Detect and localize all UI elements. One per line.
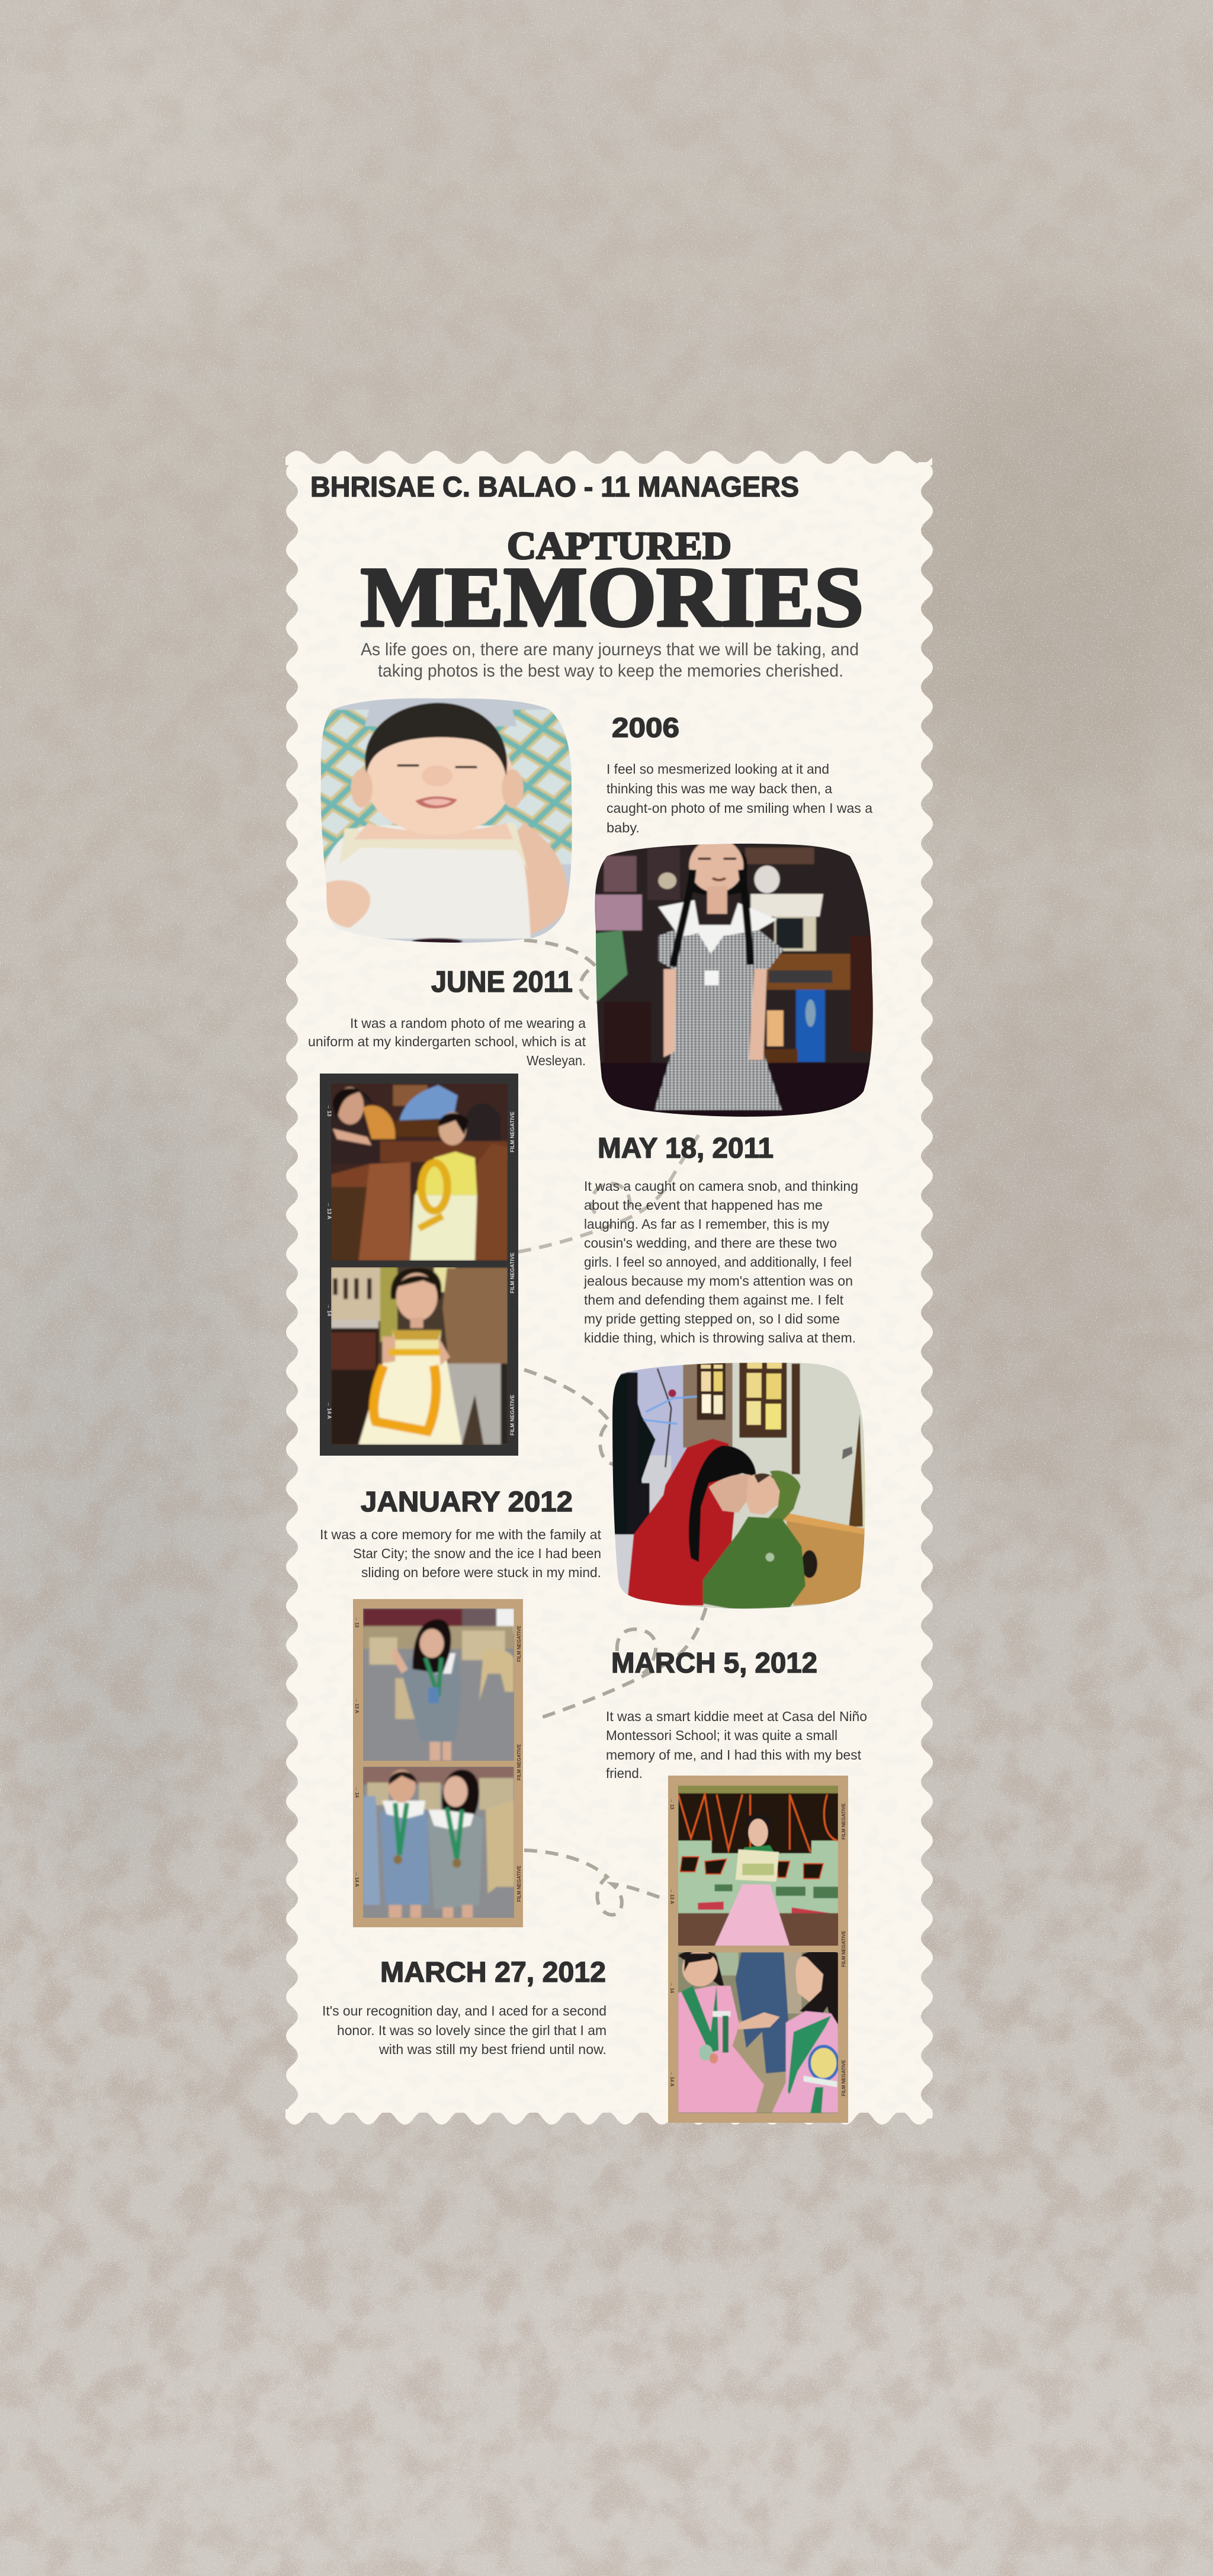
text: May 18, 2011 story <box>583 1178 858 1345</box>
text: May 18, 2011 story: my pride getting stepped on, so I did some <box>584 1311 840 1327</box>
text: March 5, 2012 story: Montessori School; it was quite a small <box>606 1728 837 1743</box>
text: March 27, 2012 story: with was still my best friend until now. <box>378 2042 606 2057</box>
subtitle: As life goes on, there are many journeys that we will be taking, and <box>361 640 859 659</box>
film labels: → 13 <box>354 1616 360 1628</box>
film labels: FILM NEGATIVE <box>509 1395 515 1436</box>
text: January 2012 story: Star City; the snow and the ice I had been <box>353 1546 601 1561</box>
frame: girl in pew <box>329 1079 509 1266</box>
frame: girl with flower basket <box>329 1266 509 1449</box>
heading: March 5, 2012: MARCH 5, 2012 <box>611 1648 817 1679</box>
face <box>365 719 514 835</box>
text: June 2011 story: Wesleyan. <box>527 1053 586 1068</box>
text: March 5, 2012 story: memory of me, and I had this with my best <box>606 1747 862 1763</box>
panel: torn cream paper <box>283 447 936 2127</box>
text: 2006 story: caught-on photo of me smiling when I was a <box>606 800 872 816</box>
heading: March 27, 2012: MARCH 27, 2012 <box>380 1957 606 1988</box>
text: March 5, 2012 story: friend. <box>606 1766 643 1781</box>
film labels: FILM NEGATIVE <box>509 1111 515 1152</box>
film labels: → 14 <box>669 1982 675 1994</box>
arm and body <box>517 823 568 936</box>
author heading: BHRISAE C. BALAO - 11 MANAGERS <box>310 472 799 503</box>
title: MEMORIES <box>361 550 864 645</box>
frame: girl with certificate <box>677 1785 839 1947</box>
text: January 2012 story: It was a core memory for me with the family at <box>320 1527 602 1542</box>
film labels: → 13 <box>669 1798 675 1810</box>
text: June 2011 story <box>308 1015 586 1068</box>
film labels: → 14 A <box>669 2071 675 2087</box>
frame: girl waving among chairs <box>358 1606 518 1764</box>
dashed path: baby photo to uniform photo <box>524 940 601 1002</box>
photo: smiling baby <box>321 698 572 943</box>
text: 2006 story: I feel so mesmerized looking at it and <box>606 761 829 777</box>
girl <box>689 845 747 898</box>
dashed path: film strip to Star City photo <box>524 1370 622 1465</box>
film labels <box>326 1104 515 1436</box>
text: May 18, 2011 story: about the event that happened has me <box>584 1197 823 1213</box>
text: May 18, 2011 story: It was a caught on camera snob, and thinking <box>584 1178 858 1194</box>
film labels: FILM NEGATIVE <box>516 1625 522 1662</box>
film strip: recognition day photos <box>668 1776 848 2123</box>
subtitle: taking photos is the best way to keep the memories cherished. <box>378 661 843 681</box>
film labels: → 13 A <box>326 1202 332 1220</box>
title: CAPTURED <box>507 524 731 568</box>
film strip: wedding photos <box>320 1074 518 1456</box>
photo: girl in gingham uniform <box>589 838 880 1121</box>
heading: January 2012: JANUARY 2012 <box>361 1486 573 1518</box>
film labels: → 13 A <box>354 1697 360 1713</box>
text: June 2011 story: uniform at my kindergarten school, which is at <box>308 1034 586 1049</box>
frame: two girls with medals <box>358 1764 518 1923</box>
heading: 2006: 2006 <box>612 712 679 743</box>
film labels: FILM NEGATIVE <box>841 2059 846 2096</box>
text: March 5, 2012 story: It was a smart kiddie meet at Casa del Niño <box>606 1709 867 1724</box>
text: June 2011 story: It was a random photo of me wearing a <box>350 1015 586 1031</box>
film labels: FILM NEGATIVE <box>841 1930 846 1967</box>
film labels: FILM NEGATIVE <box>516 1744 522 1780</box>
text: March 27, 2012 story <box>322 2003 606 2057</box>
text: 2006 story <box>606 761 872 835</box>
subtitle <box>361 640 859 681</box>
text: May 18, 2011 story: them and defending them against me. I felt <box>584 1292 844 1308</box>
dashed path: March film strip to recognition film strip <box>524 1850 665 1915</box>
film labels: → 13 A <box>669 1888 675 1904</box>
film labels: → 14 A <box>354 1871 360 1887</box>
film labels: FILM NEGATIVE <box>841 1803 846 1840</box>
text: 2006 story: baby. <box>606 820 640 835</box>
film labels: FILM NEGATIVE <box>509 1252 515 1293</box>
film labels: FILM NEGATIVE <box>516 1865 522 1902</box>
text: May 18, 2011 story: girls. I feel so annoyed, and additionally, I feel <box>584 1254 852 1270</box>
film strip: Casa del Niño photos <box>353 1599 523 1927</box>
text: January 2012 story: sliding on before were stuck in my mind. <box>361 1565 601 1580</box>
text: March 27, 2012 story: It's our recognition day, and I aced for a second <box>322 2003 606 2018</box>
text: March 5, 2012 story <box>606 1709 867 1781</box>
text: January 2012 story <box>320 1527 602 1580</box>
heading: June 2011: JUNE 2011 <box>431 965 573 998</box>
film labels: → 14 <box>354 1786 360 1798</box>
text: May 18, 2011 story: cousin's wedding, and there are these two <box>584 1235 837 1251</box>
text: 2006 story: thinking this was me way back then, a <box>606 781 832 796</box>
dashed path: film strip to wedding story <box>518 1129 703 1252</box>
hair <box>365 703 507 776</box>
film labels: → 13 <box>326 1104 332 1117</box>
film labels: → 14 A <box>326 1401 332 1420</box>
film labels <box>354 1616 522 1902</box>
heading: May 18, 2011: MAY 18, 2011 <box>598 1133 774 1164</box>
text: March 27, 2012 story: honor. It was so lovely since the girl that I am <box>337 2023 606 2038</box>
film labels <box>669 1798 846 2096</box>
text: May 18, 2011 story: laughing. As far as I remember, this is my <box>584 1216 829 1232</box>
photo: mother and daughter at Star City <box>604 1357 877 1617</box>
dashed path: Star City photo to March film strip <box>536 1608 706 1719</box>
frame: two girls in pink <box>677 1950 839 2114</box>
film labels: → 14 <box>326 1303 332 1316</box>
text: May 18, 2011 story: jealous because my mom's attention was on <box>583 1273 853 1289</box>
text: May 18, 2011 story: kiddie thing, which is throwing saliva at them. <box>584 1330 856 1345</box>
pillow <box>314 710 589 864</box>
